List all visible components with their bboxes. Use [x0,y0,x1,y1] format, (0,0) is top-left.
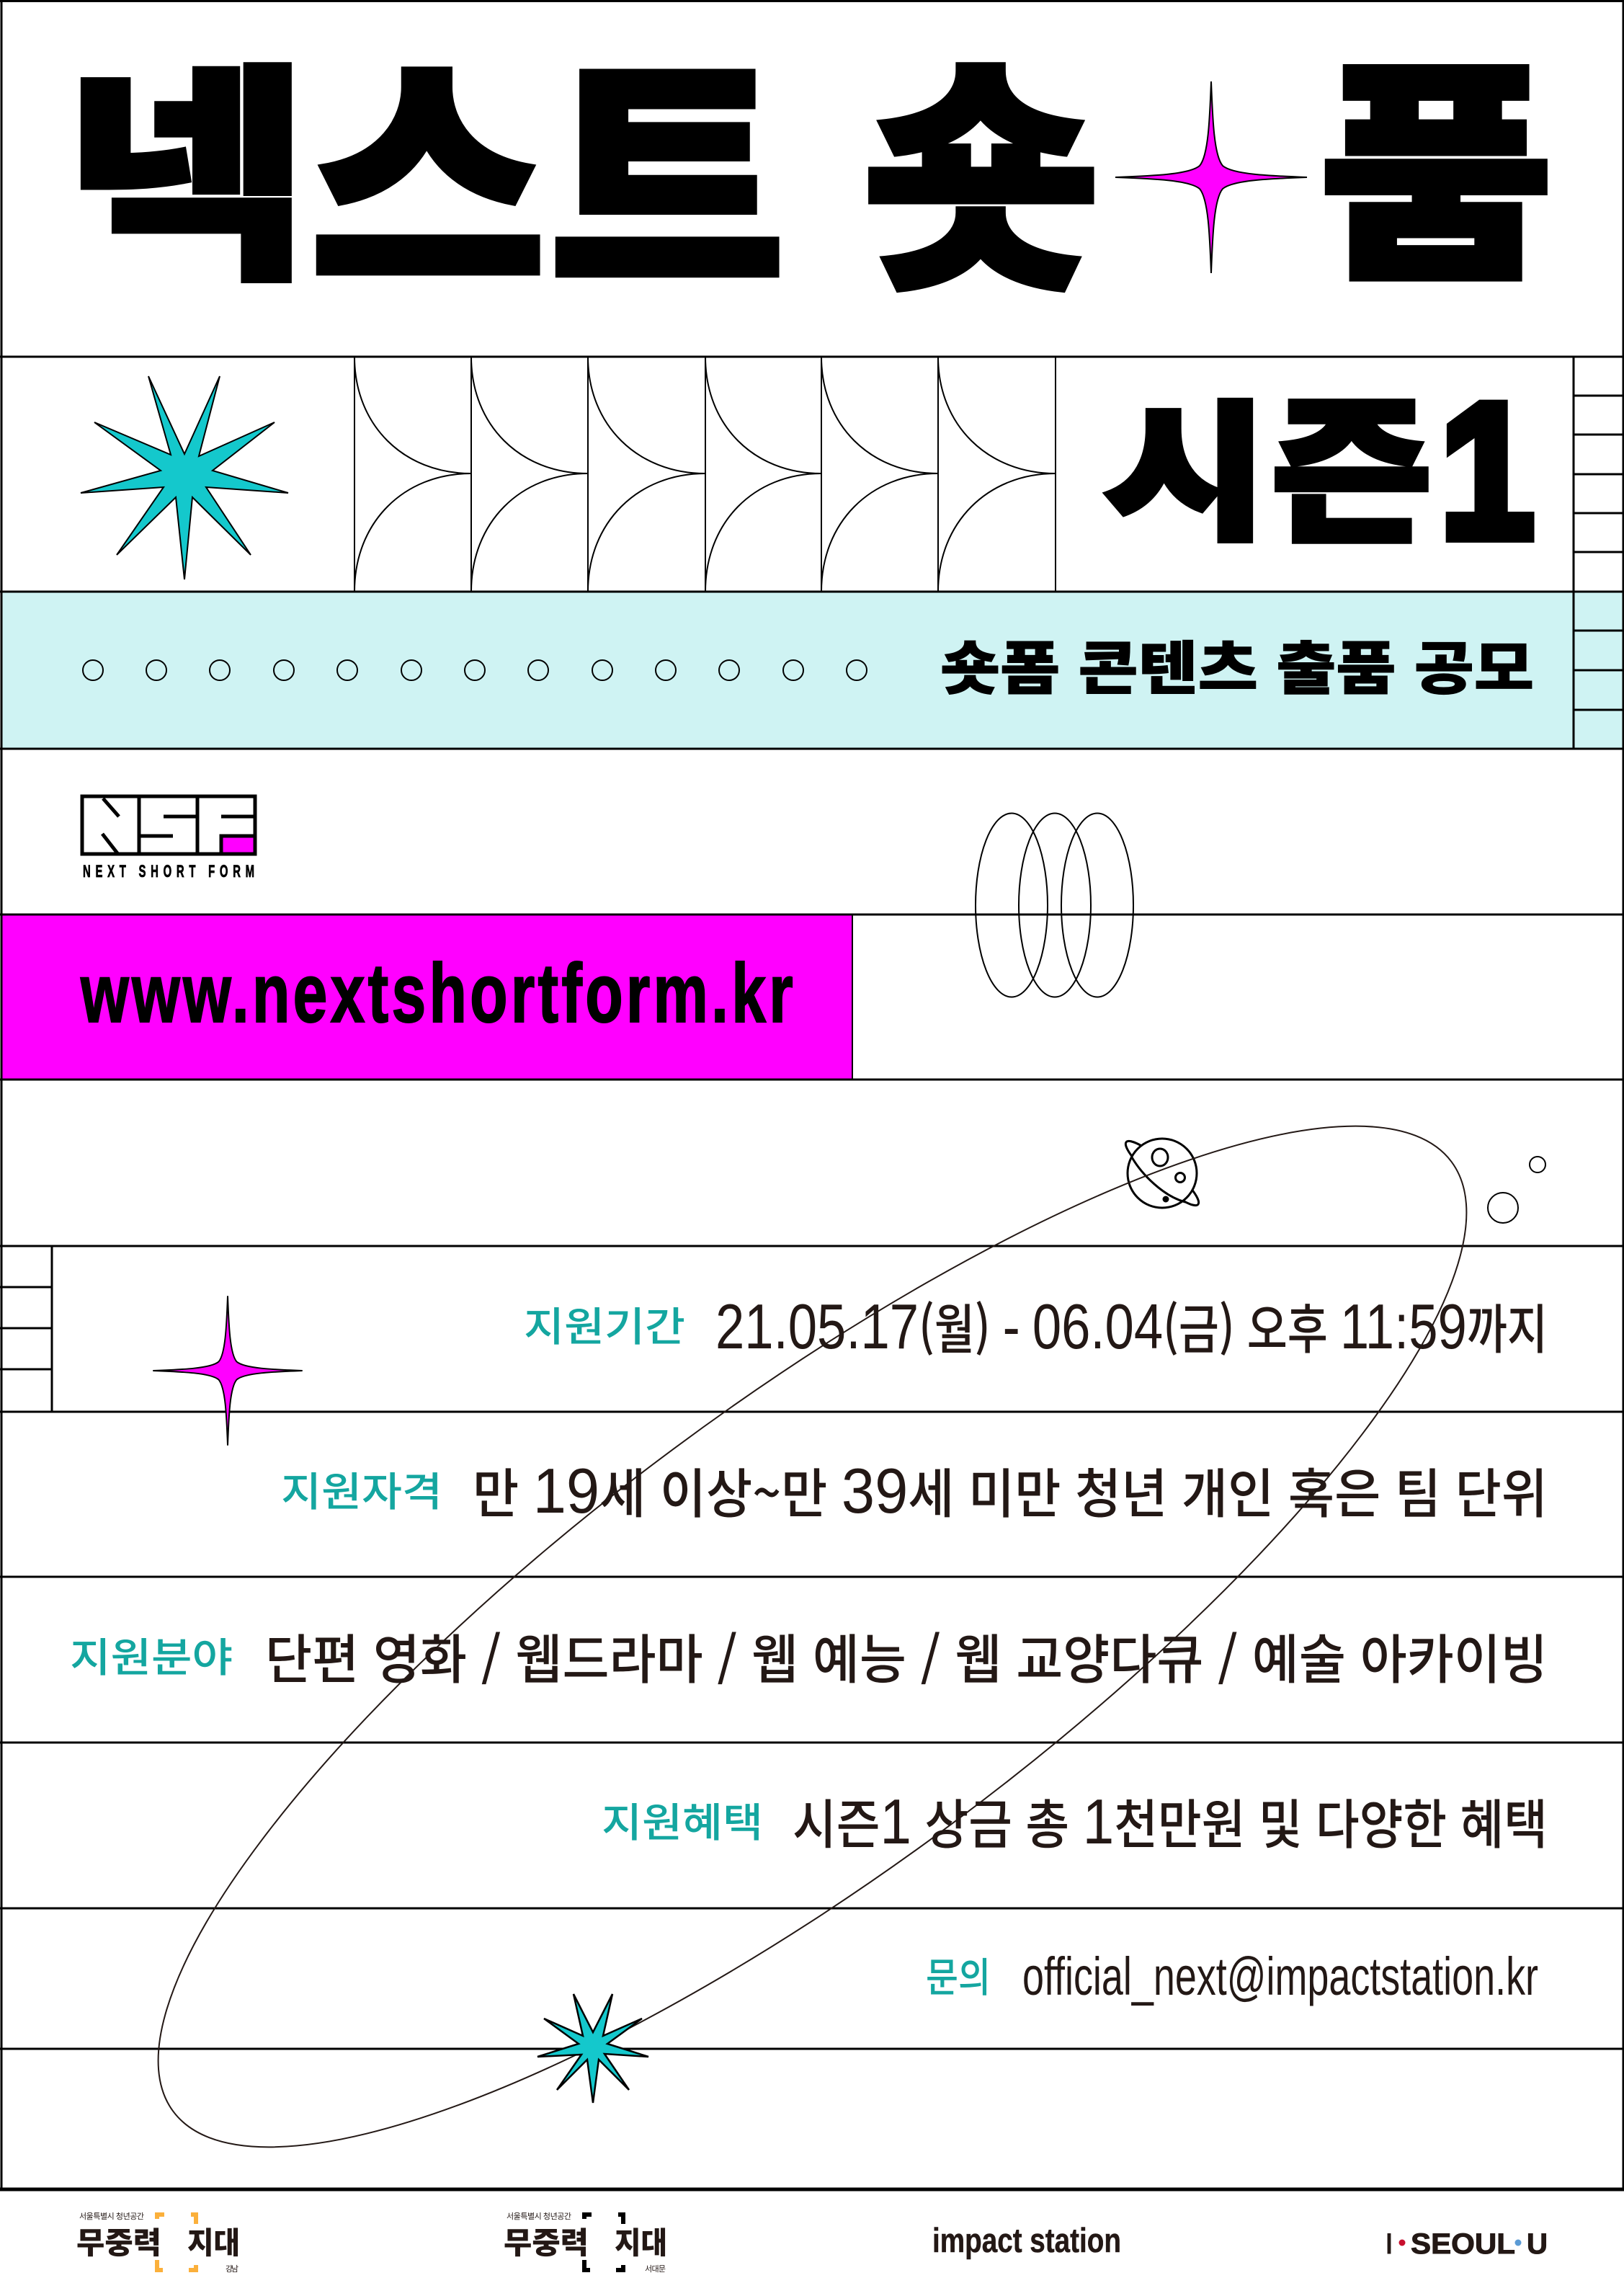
url text: www.nextshortform.kr [80,946,793,1040]
logo: NSF [82,795,255,855]
heading: 시즌1 [1104,346,1534,578]
heading: 시즌1: 시 [1104,355,1267,569]
footer logo: 무중력 지대 강남: 무중력 [76,2219,161,2263]
info row: 지원분야: 단편 영화 / 웹드라마 / 웹 예능 / 웹 교양다큐 / 예술 아카이빙 [265,1617,1548,1694]
title: 넥스트 숏폼 [65,0,1553,350]
icon: planet with ring [1120,1134,1205,1212]
orbit ellipse [34,974,1591,2296]
icon: teal starburst on orbit [537,1994,648,2103]
info row: 문의: 문의 [926,1946,991,2004]
icon: magenta four-point star in title [1115,81,1307,273]
footer logo: I SEOUL U: SEOUL [1411,2228,1515,2260]
icon: teal nine-point starburst [81,376,288,579]
footer logo: 무중력 지대 서대문: 서울특별시 청년공간 [507,2210,571,2222]
footer logo: 무중력 지대 강남 [76,2210,240,2274]
heading: 시즌1: 즌 [1272,346,1432,574]
info row: 지원분야: 지원분야 [70,1626,233,1684]
footer logo: 무중력 지대 서대문 [504,2210,667,2274]
icon: three overlapping ellipses [976,813,1133,997]
icon: small bubbles [1488,1157,1545,1223]
info row: 지원기간: 지원기간 [524,1295,685,1353]
footer logo: 무중력 지대 강남: 지대 [187,2219,240,2263]
info row: 지원자격: 지원자격 [281,1460,442,1518]
icon: magenta four-point star left [153,1296,303,1446]
footer logo: 무중력 지대 서대문: 무중력 [504,2219,589,2263]
footer logo: 무중력 지대 강남: 서울특별시 청년공간 [79,2210,144,2222]
info row: 지원자격: 만 19세 이상~만 39세 미만 청년 개인 혹은 팀 단위 [473,1451,1548,1529]
footer logo: 무중력 지대 서대문: 지대 [615,2219,667,2263]
info row: 지원혜택: 지원혜택 [602,1791,763,1849]
panel: magenta url band [1,915,852,1080]
footer logo: I SEOUL U [1386,2228,1548,2260]
subtitle: 숏폼 콘텐츠 출품 공모: 숏폼 콘텐츠 출품 공모 [940,623,1534,706]
title: 넥스트 숏폼: 넥 [65,0,306,324]
footer logo: 무중력 지대 강남: 강남 [226,2263,238,2274]
panel: mint subtitle band [1,592,1624,749]
logo caption: NEXT SHORT FORM [83,863,254,881]
pattern: arched curves row [354,357,1056,592]
footer logo: I SEOUL U: U [1527,2228,1548,2260]
info row: 지원기간: 21.05.17(월) - 06.04(금) 오후 11:59까지 [715,1287,1548,1364]
footer logo: I SEOUL U: I [1386,2228,1392,2260]
footer logo: impact station: impact station [932,2221,1121,2259]
heading: 시즌1: 1 [1440,365,1534,578]
info row: 지원혜택: 시즌1 상금 총 1천만원 및 다양한 혜택 [793,1782,1548,1859]
row of small circles [83,660,867,680]
footer logo: 무중력 지대 서대문: 서대문 [645,2263,666,2274]
